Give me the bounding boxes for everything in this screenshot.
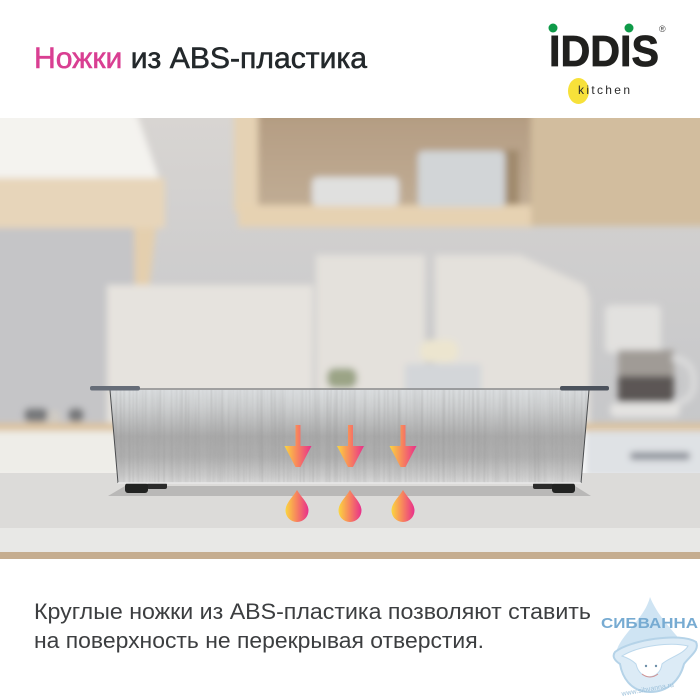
logo wordmark: IDDIS xyxy=(549,27,659,76)
watermark bathtub inner xyxy=(622,644,688,677)
arrow 1 xyxy=(284,425,312,467)
logo green dot right xyxy=(624,24,634,32)
counter top xyxy=(0,473,700,528)
registered mark: ® xyxy=(659,24,666,34)
counter wood edge xyxy=(0,552,700,559)
description line 2: на поверхность не перекрывая отверстия. xyxy=(34,628,484,653)
arrow 2 xyxy=(337,425,364,467)
watermark brand name: СИБВАННА xyxy=(601,615,698,632)
sink right edge xyxy=(581,390,589,483)
foot front right xyxy=(552,483,575,493)
logo yellow circle xyxy=(568,78,589,104)
arrow 3 xyxy=(390,425,416,467)
drop 2 xyxy=(338,490,362,522)
foot back left xyxy=(147,483,167,489)
sink steel body xyxy=(110,390,589,483)
watermark face xyxy=(645,665,657,667)
logo green dot left xyxy=(548,24,558,32)
drop 3 xyxy=(392,490,414,522)
title: Ножки из ABS-пластика xyxy=(34,42,367,75)
description line 1: Круглые ножки из ABS-пластика позволяют ставить xyxy=(34,599,591,624)
sink xyxy=(90,386,609,496)
description text xyxy=(34,599,591,653)
wall xyxy=(135,118,700,426)
sink top edge xyxy=(138,388,562,390)
foot back right xyxy=(533,483,553,489)
watermark bathtub xyxy=(614,637,697,692)
counter front band xyxy=(0,528,700,552)
right rim xyxy=(560,386,609,390)
logo: IDDIS kitchen xyxy=(548,24,666,104)
blurred kitchen furniture xyxy=(0,100,700,477)
sink left edge xyxy=(110,390,118,483)
logo kitchen word: kitchen xyxy=(578,83,630,97)
watermark url: www.sibvanna.ru xyxy=(620,682,675,698)
kitchen background photo xyxy=(0,100,700,559)
drop 1 xyxy=(286,490,308,522)
left rim xyxy=(90,386,140,390)
sink shadow hole xyxy=(108,486,591,496)
watermark water drop xyxy=(616,597,686,660)
foot front left xyxy=(125,483,148,493)
watermark smile xyxy=(642,674,658,677)
watermark: Sibvanna xyxy=(601,597,698,698)
sink bottom edge xyxy=(118,482,581,484)
